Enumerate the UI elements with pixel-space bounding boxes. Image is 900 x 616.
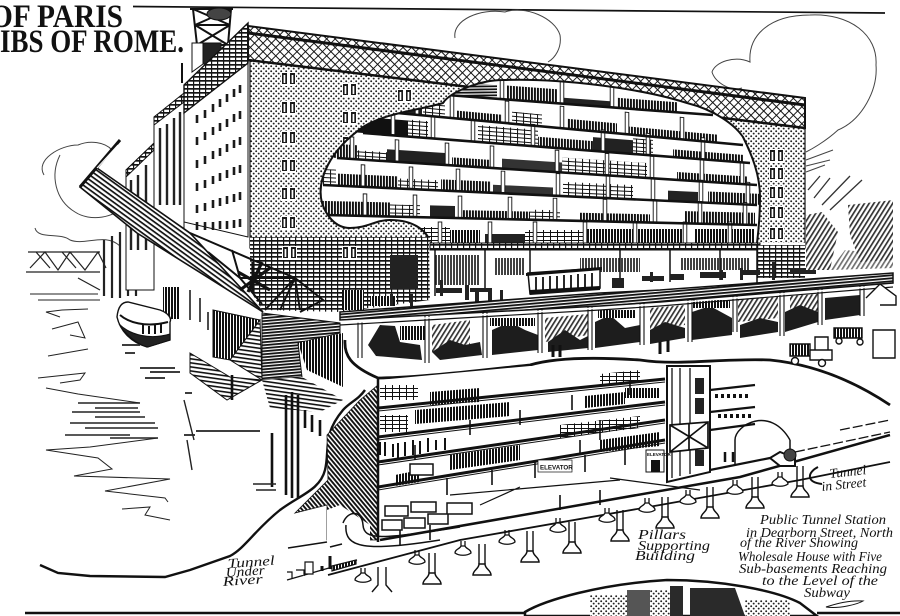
ground storey with shop fronts — [250, 237, 805, 312]
top rule — [133, 6, 885, 13]
label: tunnel in street: in Street — [821, 474, 868, 494]
tunnel under river outline — [40, 390, 365, 577]
second floor goods — [406, 96, 717, 142]
side tunnel — [710, 385, 890, 470]
caption: public tunnel station: Wholesale House with Five — [738, 549, 882, 564]
elevator label — [538, 460, 573, 472]
seventh floor goods — [410, 222, 755, 244]
stored goods in basements — [395, 388, 660, 486]
river water lines — [30, 294, 276, 520]
label: pillars supporting building: Building — [635, 548, 695, 563]
label: pillars supporting building — [635, 527, 710, 563]
label: pillars supporting building: Supporting — [638, 538, 710, 553]
supporting pillars — [355, 466, 809, 592]
pier and retaining wall — [190, 310, 343, 498]
elevator shaft: ELEVATOR — [647, 452, 672, 457]
clouds — [35, 10, 876, 246]
label: tunnel under river: Under — [225, 562, 266, 580]
caption: public tunnel station — [738, 512, 893, 607]
cutaway of warehouse floors — [318, 73, 763, 244]
label: tunnel under river: Tunnel — [227, 553, 275, 571]
shed beside the pier — [160, 270, 214, 350]
next illustration peeking at bottom edge — [25, 580, 900, 616]
label: tunnel under river: River — [221, 571, 264, 589]
floor slabs — [323, 95, 757, 225]
line to tunnel mouth — [288, 542, 342, 548]
elevator label: ELEVATOR — [540, 464, 573, 472]
basement roof outline — [345, 340, 890, 405]
motor cars on the right — [790, 284, 896, 366]
fifth floor goods — [318, 163, 763, 205]
sub-basement earth hatch — [295, 385, 378, 540]
street traffic: wagons and crowds — [342, 262, 816, 310]
caption: public tunnel station: Public Tunnel Station — [759, 512, 886, 527]
subway tunnel tube — [343, 513, 460, 547]
label: tunnel under river — [221, 553, 275, 589]
subway freight cars — [382, 464, 472, 530]
streetcar — [526, 267, 602, 295]
headline fragment: IBS OF ROME. — [0, 24, 184, 60]
caption: public tunnel station: in Dearborn Street, North — [746, 525, 893, 540]
space under the street — [358, 283, 893, 363]
water tower — [182, 8, 233, 83]
bridge truss — [190, 233, 323, 312]
building: far wings — [126, 93, 184, 290]
building: lattice cornice — [248, 26, 805, 128]
caption: public tunnel station: Sub-basements Reaching — [739, 561, 887, 576]
elevated street deck — [340, 273, 893, 325]
caption: public tunnel station: Subway — [804, 585, 850, 600]
top floor goods — [455, 81, 677, 111]
caption: public tunnel station: to the Level of the — [762, 573, 878, 588]
elevator shaft — [646, 366, 710, 482]
sub-basements cross-section — [287, 364, 890, 580]
caption: public tunnel station: of the River Showing — [740, 535, 858, 550]
building: end wall — [184, 23, 248, 237]
smoke on the right edge — [806, 176, 893, 270]
third floor goods — [357, 115, 743, 162]
headline fragment — [0, 0, 184, 60]
label: tunnel in street — [810, 462, 868, 494]
label: pillars supporting building: Pillars — [637, 527, 686, 542]
bascule bridge leaf — [80, 140, 263, 312]
building: front stippled wall — [250, 58, 805, 248]
subway train in tunnel — [287, 556, 357, 580]
sixth floor goods — [320, 193, 755, 225]
label: tunnel in street: Tunnel — [829, 462, 867, 481]
boat — [117, 302, 171, 347]
fourth floor goods — [322, 135, 747, 185]
tunnel mouth cleared from hatch — [327, 505, 370, 542]
distant bridge — [26, 232, 136, 298]
